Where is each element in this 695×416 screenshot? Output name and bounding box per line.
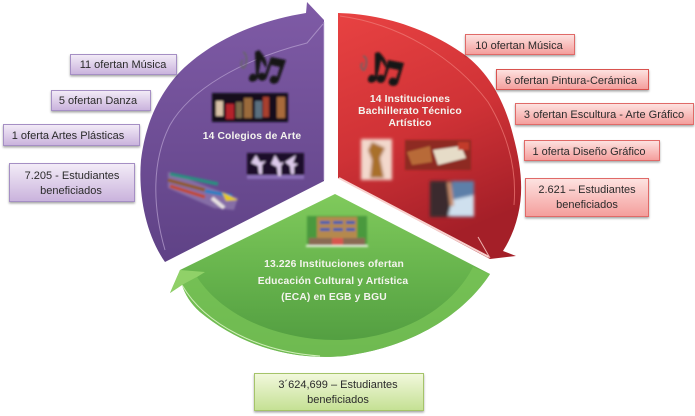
image: dancers xyxy=(212,93,288,122)
callout: 1 oferta Artes Plásticas: 1 oferta Artes Plásticas xyxy=(12,130,125,142)
callout: 5 ofertan Danza xyxy=(52,90,150,110)
callout: 1 oferta Diseño Gráfico xyxy=(524,140,660,160)
callout: 5 ofertan Danza: 5 ofertan Danza xyxy=(59,95,138,107)
heading: 13.226 Instituciones ofertan ECA: (ECA) en EGB y BGU xyxy=(281,292,387,303)
heading: 13.226 Instituciones ofertan ECA: Educación Cultural y Artística xyxy=(258,276,408,287)
callout: 3'624,699 Estudiantes beneficiados xyxy=(254,374,424,410)
image: ballet dancers xyxy=(247,153,304,179)
callout: 3 ofertan Escultura - Arte Gráfico xyxy=(516,104,694,124)
callout: 10 ofertan Música: 10 ofertan Música xyxy=(475,40,564,52)
shape: purple arrow xyxy=(140,2,324,262)
icon: music notes xyxy=(241,50,286,84)
heading: 14 Colegios de Arte: 14 Colegios de Arte xyxy=(203,131,301,142)
callout: 2.621 Estudiantes beneficiados: 2.621 – Estudiantes xyxy=(538,184,636,196)
callout: 2.621 Estudiantes beneficiados: beneficiados xyxy=(556,199,618,211)
panel: purple Colegios de Arte arrow segment xyxy=(140,2,324,262)
panel: red Bachillerato Técnico Artístico arrow segment xyxy=(338,13,521,259)
shape: red arrow xyxy=(338,13,521,259)
callout: 3'624,699 Estudiantes beneficiados: 3´624,699 – Estudiantes xyxy=(278,379,398,391)
callout: 11 ofertan Música: 11 ofertan Música xyxy=(80,59,167,71)
image: drawing tools xyxy=(405,140,471,170)
heading: 14 Instituciones Bachillerato Técnico Artístico xyxy=(358,94,462,129)
callout: 3'624,699 Estudiantes beneficiados: beneficiados xyxy=(307,394,369,406)
heading: 13.226 Instituciones ofertan ECA xyxy=(258,259,408,303)
callout: 10 ofertan Música xyxy=(466,34,574,54)
heading: 14 Instituciones Bachillerato Técnico Artístico: Bachillerato Técnico xyxy=(358,106,462,117)
callout: 1 oferta Diseño Gráfico: 1 oferta Diseño Gráfico xyxy=(532,146,646,158)
callout: 7.205 Estudiantes beneficiados xyxy=(10,164,134,202)
callout: 6 ofertan Pintura-Cerámica xyxy=(496,70,648,90)
image: hand painting xyxy=(430,181,474,217)
callout: 7.205 Estudiantes beneficiados: 7.205 - Estudiantes xyxy=(25,170,120,182)
panel: green Educación Cultural y Artística arrow segment xyxy=(170,194,490,357)
callout: 6 ofertan Pintura-Cerámica: 6 ofertan Pintura-Cerámica xyxy=(505,75,638,87)
callout: 1 oferta Artes Plásticas xyxy=(4,124,140,146)
shape: green arrow xyxy=(170,194,490,357)
callout: 3 ofertan Escultura - Arte Gráfico: 3 ofertan Escultura - Arte Gráfico xyxy=(524,109,684,121)
icon: music notes xyxy=(361,52,404,86)
callout: 7.205 Estudiantes beneficiados: beneficiados xyxy=(40,185,102,197)
heading: 13.226 Instituciones ofertan ECA: 13.226 Instituciones ofertan xyxy=(264,259,404,270)
image: paint brushes xyxy=(168,172,238,210)
heading: 14 Instituciones Bachillerato Técnico Artístico: Artístico xyxy=(388,118,432,129)
callout: 11 ofertan Música xyxy=(70,54,176,74)
heading: 14 Instituciones Bachillerato Técnico Artístico: 14 Instituciones xyxy=(370,94,450,105)
image: sculpture xyxy=(361,139,392,180)
icon: school building xyxy=(306,216,368,247)
callout: 2.621 Estudiantes beneficiados xyxy=(526,178,648,216)
